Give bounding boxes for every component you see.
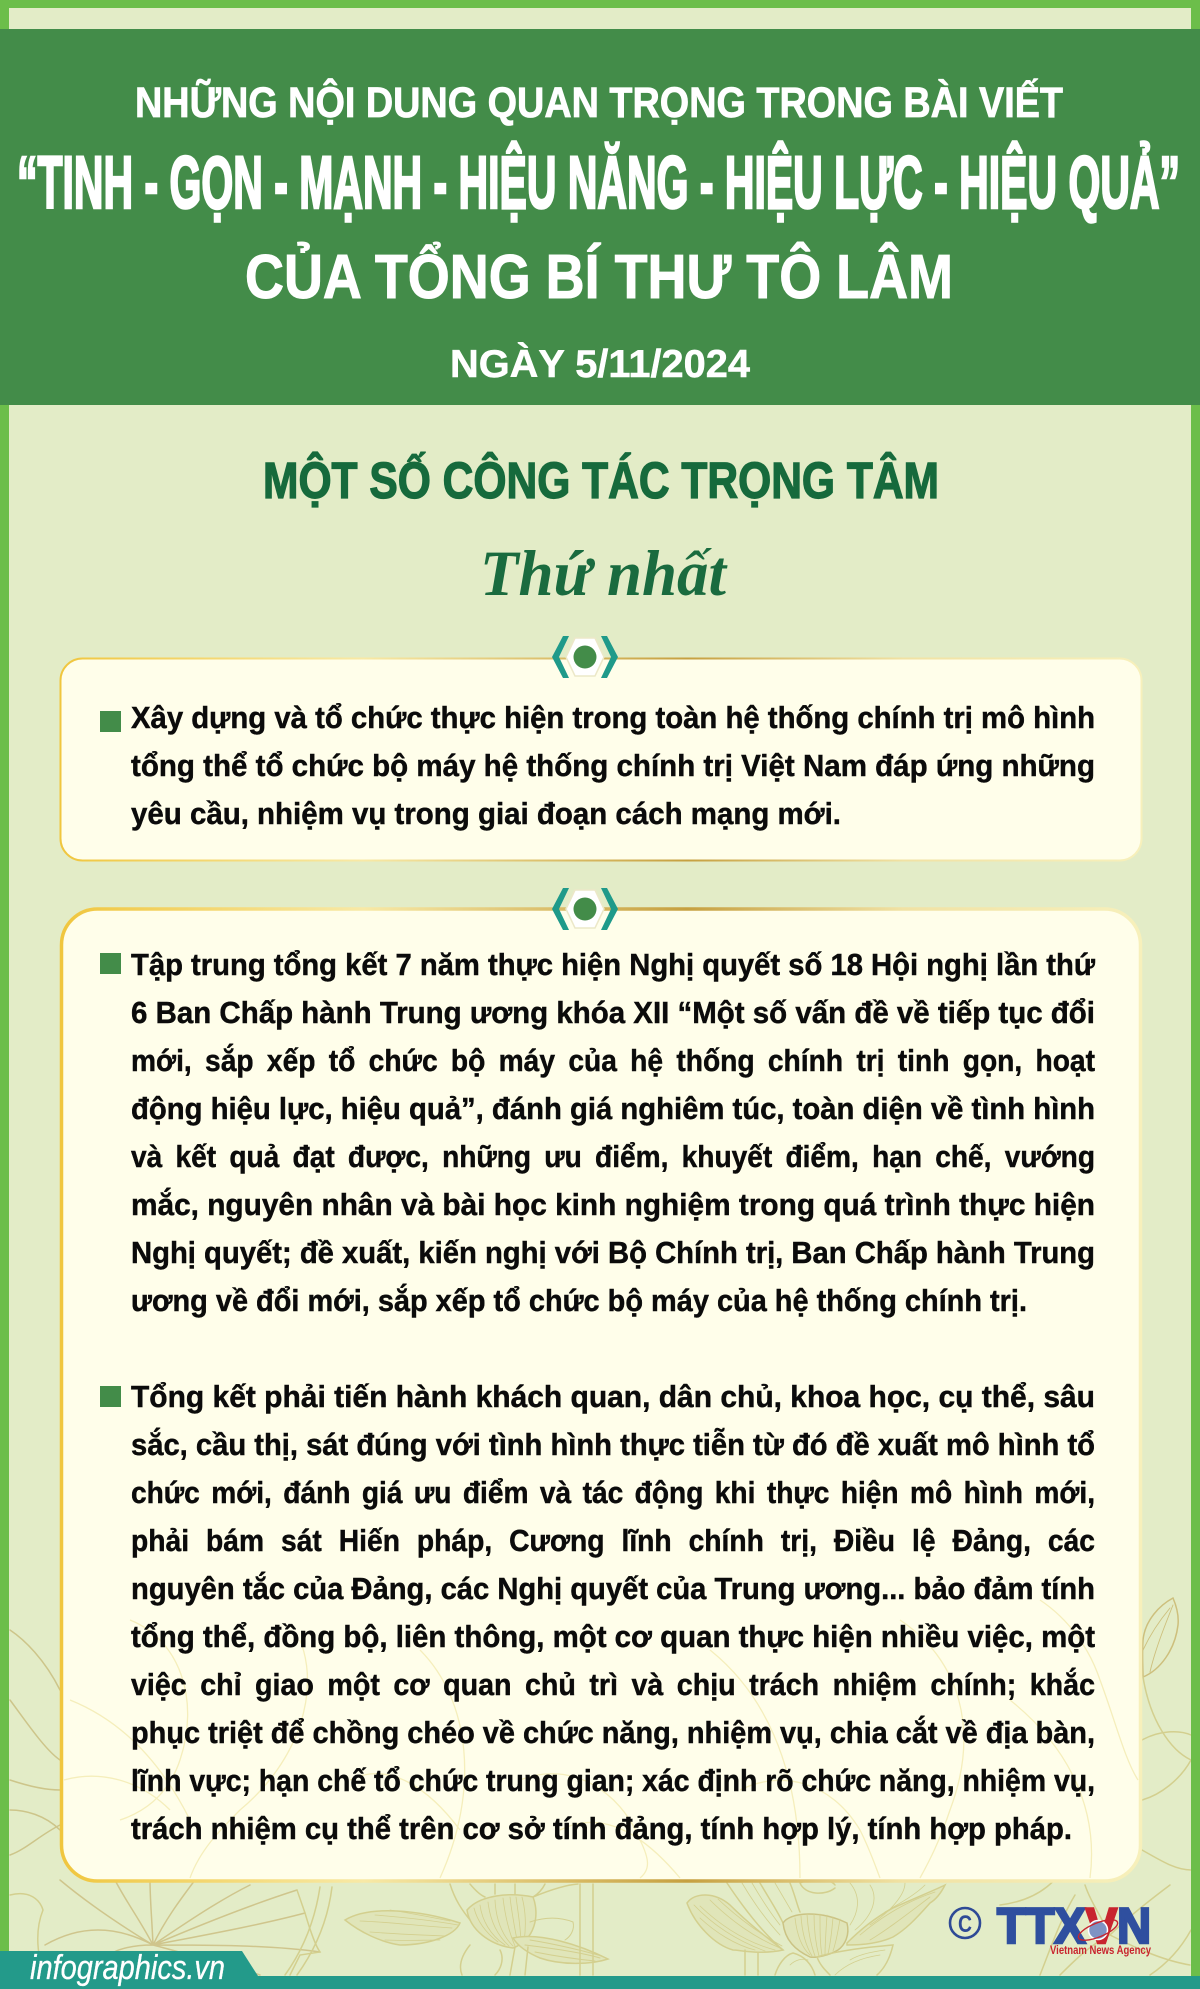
text block: paragraph two: phục triệt để chồng chéo về chức năng, nhiệm vụ, chia cắt về địa bàn,	[131, 1714, 1095, 1750]
text block: paragraph two: tổng thể, đồng bộ, liên thông, một cơ quan thực hiện nhiều việc, một	[131, 1619, 1095, 1654]
logo: TTXVN: Vietnam News Agency	[1050, 1945, 1151, 1957]
text block: paragraph one: động hiệu lực, hiệu quả”, đánh giá nghiêm túc, toàn diện về tình hình	[131, 1091, 1095, 1126]
footer source tab	[0, 1949, 258, 1989]
header date: NGÀY 5/11/2024	[450, 342, 750, 386]
text block: paragraph two	[131, 1379, 1095, 1846]
left border strip	[0, 0, 9, 1955]
section subheading: Thứ nhất	[480, 538, 728, 610]
bullet: paragraph two	[100, 1386, 121, 1407]
top border strip	[0, 0, 1200, 8]
source label: infographics.vn	[30, 1949, 225, 1987]
header line 3: CỦA TỔNG BÍ THƯ TÔ LÂM	[245, 242, 953, 312]
section heading: MỘT SỐ CÔNG TÁC TRỌNG TÂM	[263, 451, 939, 509]
header banner	[0, 29, 1200, 405]
logo: TTXVN: TTXVN	[997, 1898, 1151, 1954]
text block: paragraph two: việc chỉ giao một cơ quan chủ trì và chịu trách nhiệm chính; khắc	[131, 1666, 1095, 1702]
text block: paragraph two: chức mới, đánh giá ưu điểm và tác động khi thực hiện mô hình mới,	[131, 1475, 1095, 1510]
panel: second card	[62, 909, 1140, 1881]
panel: first card	[60, 658, 1142, 860]
text block: paragraph one: mới, sắp xếp tổ chức bộ máy của hệ thống chính trị tinh gọn, hoạt	[131, 1042, 1095, 1078]
bullet: paragraph one	[100, 953, 121, 974]
text block: paragraph two: trách nhiệm cụ thể trên cơ sở tính đảng, tính hợp lý, tính hợp pháp.	[131, 1811, 1072, 1846]
text block: paragraph two: sắc, cầu thị, sát đúng với tình hình thực tiễn từ đó đề xuất mô hình tổ	[131, 1426, 1095, 1462]
bullet	[100, 711, 121, 732]
text block: paragraph two: Tổng kết phải tiến hành khách quan, dân chủ, khoa học, cụ thể, sâu	[131, 1379, 1095, 1414]
text block: Xây dựng và tổ chức thực hiện trong toàn hệ thống chính trị mô hình	[131, 700, 1095, 735]
text block	[131, 700, 1095, 831]
text block: paragraph one: và kết quả đạt được, những ưu điểm, khuyết điểm, hạn chế, vướng	[131, 1139, 1095, 1174]
text block: paragraph one: Tập trung tổng kết 7 năm thực hiện Nghị quyết số 18 Hội nghị lần thứ	[131, 947, 1096, 982]
text block: paragraph one: ương về đổi mới, sắp xếp tổ chức bộ máy của hệ thống chính trị.	[131, 1282, 1027, 1318]
text block: paragraph two: lĩnh vực; hạn chế tổ chức trung gian; xác định rõ chức năng, nhiệm vụ,	[131, 1763, 1095, 1798]
text block: paragraph one	[131, 947, 1096, 1318]
footer band	[0, 1976, 1200, 1989]
icon: copyright symbol	[950, 1908, 980, 1938]
right border strip	[1191, 0, 1200, 1980]
text block: paragraph two: nguyên tắc của Đảng, các Nghị quyết của Trung ương... bảo đảm tính	[131, 1570, 1095, 1606]
icon: ornament on first card	[552, 636, 618, 678]
text block: paragraph one: 6 Ban Chấp hành Trung ương khóa XII “Một số vấn đề về tiếp tục đổi	[131, 995, 1095, 1030]
text block: paragraph two: phải bám sát Hiến pháp, Cương lĩnh chính trị, Điều lệ Đảng, các	[131, 1523, 1095, 1558]
text block: tổng thể tổ chức bộ máy hệ thống chính trị Việt Nam đáp ứng những	[131, 748, 1095, 783]
icon: copyright symbol: C	[958, 1911, 972, 1938]
text block: paragraph one: Nghị quyết; đề xuất, kiến nghị với Bộ Chính trị, Ban Chấp hành Trung	[131, 1235, 1095, 1270]
text block: paragraph one: mắc, nguyên nhân và bài học kinh nghiệm trong quá trình thực hiện	[131, 1186, 1095, 1222]
icon: ornament on second card	[552, 888, 618, 930]
lotus background illustration	[10, 1598, 1191, 1975]
text block: yêu cầu, nhiệm vụ trong giai đoạn cách mạng mới.	[131, 796, 841, 831]
header line 1: NHỮNG NỘI DUNG QUAN TRỌNG TRONG BÀI VIẾT	[135, 78, 1063, 127]
